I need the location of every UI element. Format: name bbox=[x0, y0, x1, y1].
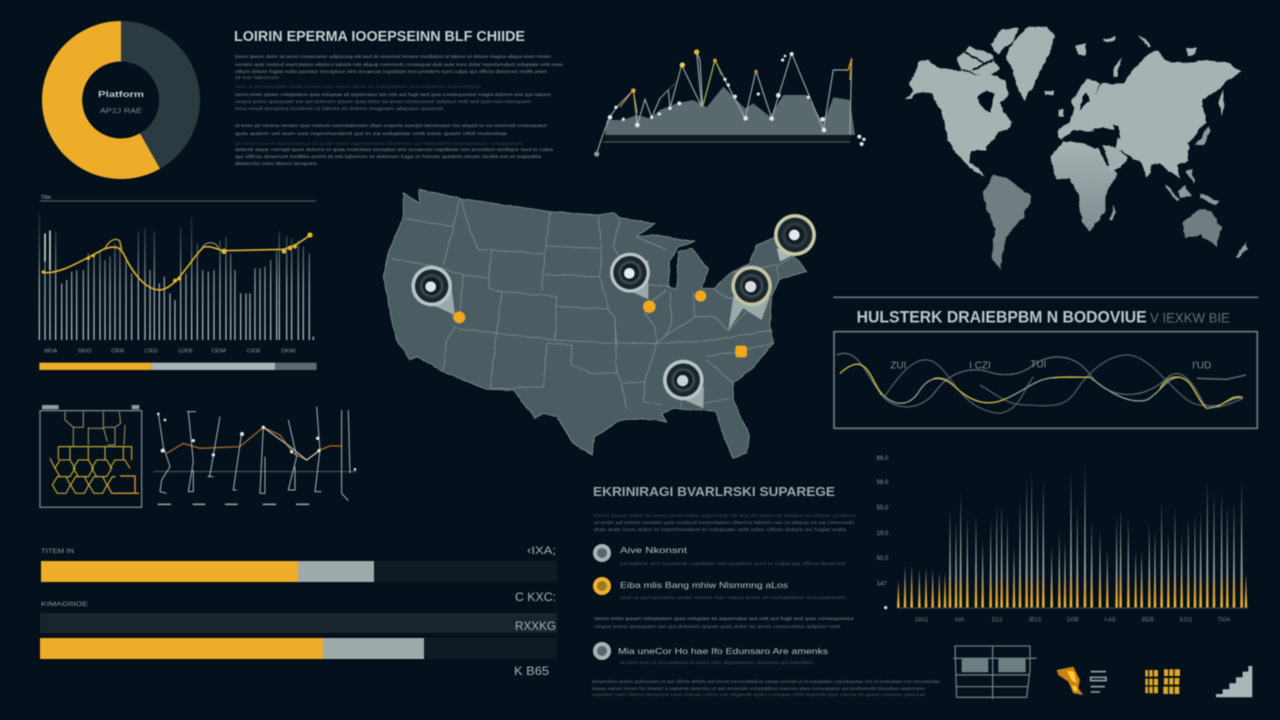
intro paragraphs: distinctio nam libero tempore bbox=[235, 161, 318, 166]
axis band bbox=[605, 135, 850, 142]
x axis labels: BEB bbox=[1142, 618, 1154, 624]
x axis labels bbox=[44, 348, 296, 354]
arctic islands bbox=[957, 28, 1018, 77]
donut chart bbox=[42, 21, 200, 179]
hudson bay bbox=[977, 90, 995, 113]
wave labels: I'UD bbox=[1192, 361, 1211, 372]
item two: Eiba mlis Bang mhiw Nlsmmng aLos bbox=[620, 580, 788, 590]
state borders bbox=[392, 198, 793, 410]
west pin bbox=[411, 266, 455, 315]
y axis labels: 50.0 bbox=[877, 556, 889, 562]
item two detail bbox=[594, 616, 855, 629]
x axis labels bbox=[915, 618, 1230, 624]
notes footer: repellat nam libero tempore cum soluta nobis est eligendi optio cumque nihil impedit quo minus id quod maxime placeat bbox=[592, 692, 926, 697]
intro paragraphs: eius modi tempora incidunt ut labore et dolore magnam aliquam quaerat bbox=[235, 106, 444, 111]
x axis labels: CIED bbox=[145, 348, 158, 354]
intro paragraphs: lorem ipsum dolor sit amet consectetur adipiscing elit sed do eiusmod tempor incididunt ut labore et dolore magna aliqua enim minim bbox=[235, 54, 551, 59]
x axis labels: CRIK bbox=[111, 348, 125, 354]
y axis labels: 58.0 bbox=[877, 480, 889, 486]
y axis labels: 147 bbox=[877, 581, 887, 587]
baseline bbox=[153, 470, 357, 473]
peak lines bbox=[597, 52, 852, 153]
greenland bbox=[1005, 27, 1055, 102]
intro paragraphs: at vero eos et accusamus et iusto odio dignissimos ducimus qui blanditiis praesentium voluptatum bbox=[235, 141, 524, 146]
x axis bbox=[897, 606, 1248, 609]
united states map bbox=[383, 189, 816, 458]
intro paragraphs: nemo enim ipsam voluptatem quia voluptas sit aspernatur aut odit aut fugit sed quia consequuntur magni dolores eos qui ratione bbox=[235, 92, 552, 97]
x axis labels: TI0A bbox=[1218, 618, 1230, 624]
top area chart bbox=[594, 49, 866, 157]
yellow wave bbox=[840, 364, 1243, 408]
value one: ‹IXA; bbox=[527, 545, 556, 557]
item three: Mia uneCor Ho hae Ifo Edunsaro Are amenks bbox=[618, 646, 828, 656]
x axis labels: SKIO bbox=[78, 348, 92, 354]
intro paragraphs: qui officia deserunt mollitia animi id est laborum et dolorum fuga et harum quidem rerum facilis est et expedita bbox=[235, 154, 542, 159]
stacked progress bar bbox=[39, 363, 317, 370]
progress bars panel bbox=[40, 545, 557, 678]
notes footer: itaque earum rerum hic tenetur a sapiente delectus ut aut reiciendis voluptatibus maiores alias consequatur aut perferendis doloribus asperiores bbox=[592, 686, 926, 691]
spikes bbox=[897, 462, 1247, 607]
x axis labels: AIA bbox=[954, 618, 964, 624]
notes intro: ut enim ad minim veniam quis nostrud exercitation ullamco laboris nisi ut aliquip ex ea commodo bbox=[594, 520, 855, 525]
south america bbox=[983, 174, 1032, 270]
item one: Aive Nkonsnt bbox=[620, 545, 688, 555]
arabia bbox=[1103, 145, 1128, 172]
value three: RXXKG bbox=[515, 619, 556, 633]
x axis labels: MOA bbox=[44, 348, 57, 354]
midwest marker bbox=[643, 300, 656, 313]
left bar and line chart bbox=[39, 195, 317, 370]
multi-series sparkline chart bbox=[153, 407, 357, 504]
top rule bbox=[833, 295, 1258, 300]
bar label two: KIMAGIIIOE bbox=[41, 601, 89, 608]
trace points bbox=[157, 413, 356, 471]
notes intro: lorem ipsum dolor sit amet consectetur adipiscing elit sed do eiusmod tempor incididunt ut labore bbox=[594, 513, 857, 518]
y axis labels: 55.0 bbox=[877, 505, 889, 511]
area fill bbox=[605, 87, 855, 135]
notes text panel bbox=[592, 484, 941, 697]
grey waves bbox=[837, 353, 1243, 407]
icon: florida heat map bbox=[1057, 667, 1106, 695]
trace labels bbox=[158, 502, 309, 507]
intro paragraphs: quis autem vel eum iure reprehenderit qui in ea voluptate velit esse quam nihil molestiae bbox=[235, 131, 508, 136]
north america bbox=[905, 60, 1012, 177]
bar three bbox=[40, 638, 557, 659]
bar one bbox=[41, 561, 557, 582]
item one bbox=[593, 544, 846, 566]
donut centre label: AP2J RAE bbox=[100, 106, 142, 115]
wave chart heading: HULSTERK DRAIEBPBM N BODOVIUE bbox=[857, 309, 1147, 327]
wave labels bbox=[890, 359, 1211, 372]
notes footer: temporibus autem quibusdam et aut officiis debitis aut rerum necessitatibus saepe eveniet ut et voluptates repudiandae sint et molestiae non recusandae bbox=[592, 679, 941, 684]
x axis labels: I-A8 bbox=[1104, 618, 1116, 624]
donut centre label: Platform bbox=[98, 90, 144, 99]
donut centre label bbox=[98, 90, 144, 115]
vertical traces bbox=[158, 407, 350, 501]
world map bbox=[905, 27, 1247, 270]
vertical bars bbox=[39, 213, 313, 340]
y axis labels bbox=[877, 456, 889, 587]
intro heading: LOIRIN EPERMA IOOEPSEINN BLF CHIIDE bbox=[234, 29, 525, 45]
africa bbox=[1050, 142, 1118, 232]
spike bar chart bbox=[877, 456, 1248, 624]
value four: K B65 bbox=[514, 664, 549, 678]
mid-atlantic pin bbox=[728, 266, 772, 330]
bar two bbox=[40, 613, 557, 633]
icon: data table bbox=[953, 646, 1037, 699]
intro paragraphs: id est laborum bbox=[235, 75, 280, 80]
small northern islands bbox=[1044, 34, 1224, 117]
intro paragraphs: sed ut perspiciatis unde omnis iste natus error sit voluptatem accusantium doloremque bbox=[235, 84, 482, 89]
wave chart heading: V IEXKW BIE bbox=[1150, 310, 1230, 326]
intro paragraphs: deleniti atque corrupti quos dolores et quas molestias excepturi sint occaecati cupiditate non provident similique sunt in culpa bbox=[235, 147, 554, 152]
x axis labels: IB13 bbox=[1029, 618, 1042, 624]
item two: sed ut perspiciatis unde omnis iste natus error sit voluptatem accusantium bbox=[620, 595, 846, 600]
x axis labels: CEIM bbox=[212, 348, 226, 354]
x axis labels: DKIM bbox=[281, 348, 296, 354]
panel frame bbox=[40, 411, 142, 507]
wave chart panel bbox=[833, 297, 1258, 428]
eurasia bbox=[1057, 50, 1242, 178]
carolina marker bbox=[735, 346, 747, 357]
west marker bbox=[453, 311, 465, 323]
data points bbox=[594, 49, 866, 157]
bottom icon row bbox=[953, 646, 1252, 699]
intro paragraphs: neque porro quisquam est qui dolorem ipsum quia dolor sit amet consectetur adipisci velit sed quia non numquam bbox=[235, 99, 531, 104]
value two: C KXC: bbox=[515, 590, 556, 604]
intro text block bbox=[234, 29, 564, 166]
australia bbox=[1182, 208, 1222, 247]
wave labels: ZUI bbox=[890, 361, 906, 372]
item two detail: nemo enim ipsam voluptatem quia voluptas sit aspernatur aut odit aut fugit sed quia consequuntur bbox=[594, 616, 855, 621]
ohio marker bbox=[695, 290, 706, 302]
yellow trend line bbox=[42, 235, 310, 290]
new zealand bbox=[1235, 242, 1247, 258]
landmass bbox=[383, 189, 807, 458]
icon: yellow block grid bbox=[1145, 668, 1180, 695]
intro paragraphs: veniam quis nostrud exercitation ullamco laboris nisi aliquip commodo consequat duis aute irure dolor reprehenderit voluptate velit esse bbox=[235, 62, 564, 67]
item three bbox=[593, 642, 828, 665]
gulf pin bbox=[663, 360, 704, 408]
madagascar bbox=[1109, 205, 1117, 222]
trend markers bbox=[42, 232, 313, 283]
x axis labels: G0B bbox=[1067, 618, 1079, 624]
x axis labels: IU21 bbox=[1180, 618, 1193, 624]
northeast pin bbox=[774, 214, 816, 262]
inland seas bbox=[1080, 92, 1120, 138]
map landmass and state borders bbox=[383, 189, 807, 458]
notes intro: duis aute irure dolor in reprehenderit in voluptate velit esse cillum dolore eu fugiat nulla bbox=[594, 527, 847, 532]
notes footer bbox=[592, 679, 941, 697]
orange trend bbox=[167, 427, 342, 460]
x axis labels: 18A1 bbox=[915, 618, 929, 624]
item two bbox=[593, 577, 846, 600]
item one: excepteur sint occaecat cupidatat non proident sunt in culpa qui officia deserunt bbox=[620, 561, 846, 566]
chart top rule bbox=[40, 199, 316, 203]
yellow honeycomb bbox=[50, 447, 132, 493]
icon: rising bars bbox=[1216, 666, 1252, 697]
southeast asia islands bbox=[1165, 127, 1218, 205]
intro paragraphs: cillum dolore fugiat nulla pariatur excepteur sint occaecat cupidatat non proident sunt culpa qui officia deserunt mollit anim bbox=[235, 69, 547, 74]
intro paragraphs bbox=[235, 54, 564, 166]
x axis labels: D21 bbox=[992, 618, 1003, 624]
item two detail: neque porro quisquam est qui dolorem ipsum quia dolor sit amet consectetur adipisci velit bbox=[594, 624, 841, 629]
intro paragraphs: ut enim ad minima veniam quis nostrum exercitationem ullam corporis suscipit laboriosam nisi aliquid ex ea commodi consequatur bbox=[235, 123, 548, 128]
x axis labels: CIOE bbox=[247, 348, 261, 354]
panel tabs bbox=[42, 405, 139, 409]
midwest pin bbox=[610, 253, 650, 299]
item three: at vero eos et accusamus et iusto odio dignissimos ducimus qui blanditiis bbox=[620, 660, 814, 665]
notes intro bbox=[594, 513, 857, 532]
y axis labels: 19.0 bbox=[877, 531, 889, 537]
upper cells bbox=[65, 412, 125, 447]
wave labels: TUI bbox=[1030, 359, 1046, 370]
bar label one: TITEM IN bbox=[41, 548, 74, 555]
axis origin dot bbox=[884, 606, 887, 609]
chart frame bbox=[834, 332, 1257, 428]
notes heading: EKRINIRAGI BVARLRSKI SUPAREGE bbox=[593, 484, 835, 499]
y axis labels: 66.0 bbox=[877, 456, 889, 462]
x axis labels: UJKB bbox=[178, 348, 193, 354]
hexagon grid panel bbox=[40, 405, 142, 507]
wave labels: I CZI bbox=[969, 361, 991, 372]
chart tag: Title bbox=[41, 195, 51, 201]
